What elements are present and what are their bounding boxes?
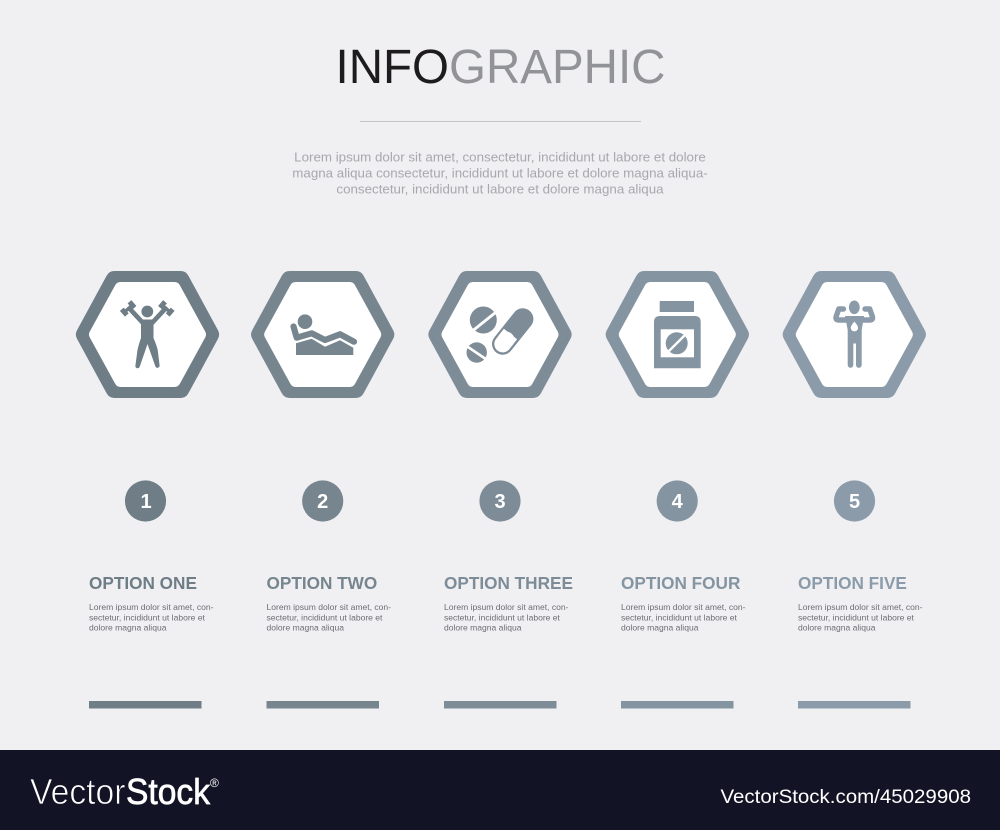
option three text <box>444 573 573 632</box>
bar four <box>621 701 734 708</box>
option one text: OPTION ONE <box>89 573 197 593</box>
hexagon four <box>615 280 740 389</box>
panel: option one <box>85 280 214 708</box>
intro text block: Lorem ipsum dolor sit amet, consectetur, incididunt ut labore et dolore <box>294 150 706 164</box>
option three text: Lorem ipsum dolor sit amet, con- <box>444 602 569 612</box>
option five text: dolore magna aliqua <box>798 622 876 632</box>
logo: VectorStock: ® <box>210 776 219 790</box>
panel: option three <box>437 280 573 708</box>
number badge 3: 3 <box>494 491 506 513</box>
logo: VectorStock: Vector <box>30 771 126 812</box>
number badge 1 <box>125 480 166 522</box>
option four text: Lorem ipsum dolor sit amet, con- <box>621 602 746 612</box>
option one text <box>89 573 214 632</box>
number badge 4: 4 <box>672 491 684 513</box>
option one text: dolore magna aliqua <box>89 622 167 632</box>
number badge 2: 2 <box>317 491 328 513</box>
title: INFOGRAPHIC <box>336 40 666 94</box>
number badge 4 <box>657 480 698 522</box>
bar five <box>798 701 910 708</box>
number badge 5: 5 <box>849 491 860 513</box>
icon: muscular man with drop <box>836 300 873 368</box>
option three text: OPTION THREE <box>444 573 573 593</box>
option two text: OPTION TWO <box>266 573 377 593</box>
logo: VectorStock: Stock <box>126 771 211 812</box>
stock image id: VectorStock.com/45029908 <box>720 787 971 808</box>
option five text: Lorem ipsum dolor sit amet, con- <box>798 602 923 612</box>
hexagon three <box>437 280 563 389</box>
bar two <box>266 701 379 708</box>
intro text block <box>292 150 708 196</box>
hexagon one <box>85 280 210 389</box>
hexagon two <box>260 280 385 389</box>
icon: pills and capsule <box>466 306 523 363</box>
option two text <box>266 573 391 632</box>
number badge 2 <box>302 480 343 522</box>
option three text: dolore magna aliqua <box>444 622 522 632</box>
icon: person reclining on bed <box>294 314 354 355</box>
intro text block: magna aliqua consectetur, incididunt ut labore et dolore magna aliqua- <box>292 166 708 180</box>
option two text: sectetur, incididunt ut labore et <box>266 612 383 622</box>
option four text: OPTION FOUR <box>621 573 741 593</box>
logo: VectorStock <box>30 771 219 812</box>
panel: option five <box>792 280 923 708</box>
option four text: sectetur, incididunt ut labore et <box>621 612 738 622</box>
bar one <box>89 701 202 708</box>
option two text: dolore magna aliqua <box>266 622 344 632</box>
number badge 3 <box>479 480 521 522</box>
bar three <box>444 701 556 708</box>
hexagon five <box>792 280 917 389</box>
option three text: sectetur, incididunt ut labore et <box>444 612 561 622</box>
option one text: sectetur, incididunt ut labore et <box>89 612 206 622</box>
footer band <box>0 750 1000 830</box>
number badge 5 <box>834 480 875 522</box>
panel: option four <box>615 280 746 708</box>
icon: man lifting dumbbells <box>122 302 173 368</box>
option five text: OPTION FIVE <box>798 573 907 593</box>
option four text <box>621 573 746 632</box>
intro text block: consectetur, incididunt ut labore et dolore magna aliqua <box>336 182 664 196</box>
panel: option two <box>260 280 391 708</box>
option two text: Lorem ipsum dolor sit amet, con- <box>266 602 391 612</box>
option one text: Lorem ipsum dolor sit amet, con- <box>89 602 214 612</box>
icon: supplement jar <box>654 301 701 368</box>
number badge 1: 1 <box>140 491 152 513</box>
option five text: sectetur, incididunt ut labore et <box>798 612 915 622</box>
option four text: dolore magna aliqua <box>621 622 699 632</box>
option five text <box>798 573 923 632</box>
